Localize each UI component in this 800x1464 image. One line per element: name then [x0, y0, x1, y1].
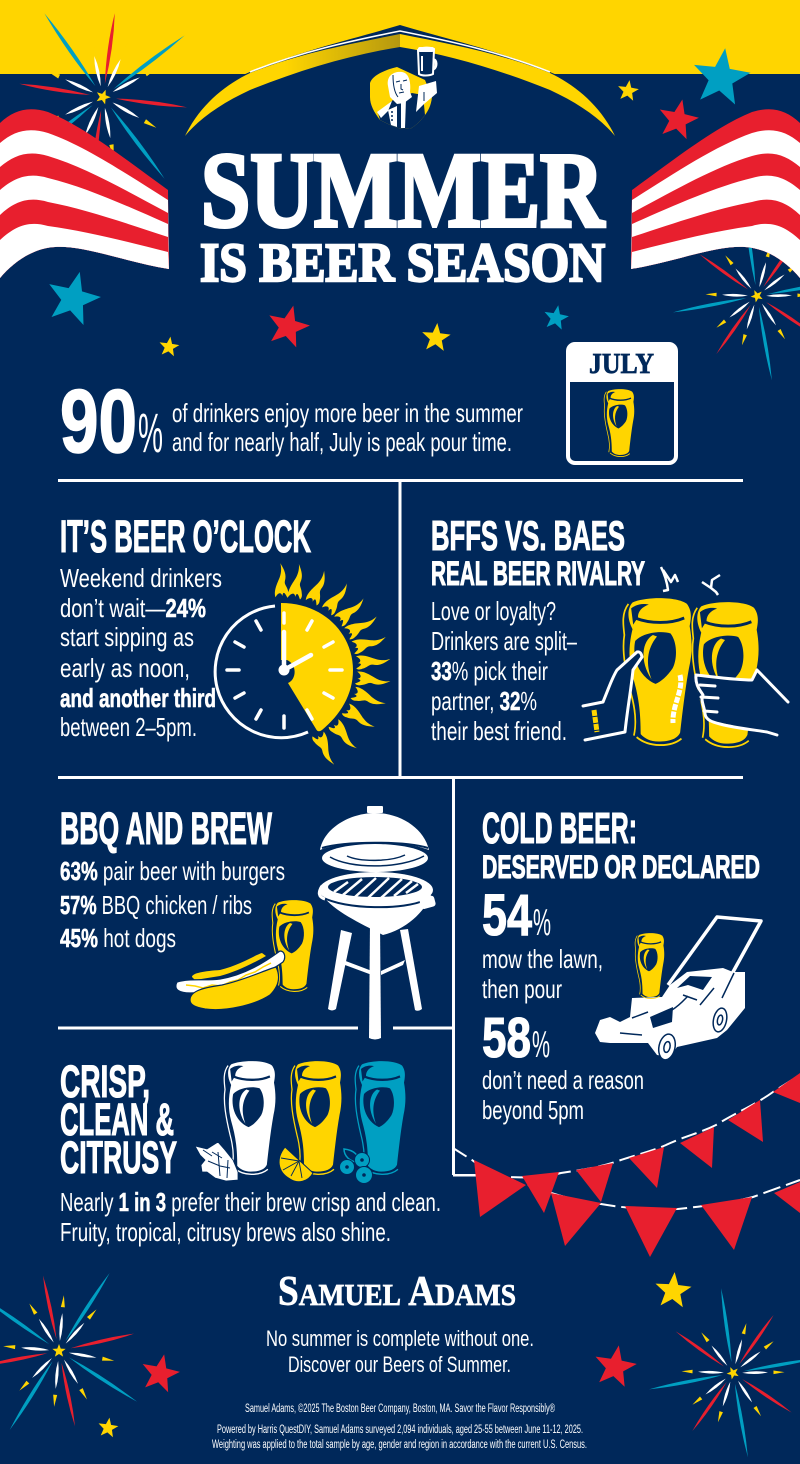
title — [200, 132, 605, 293]
stat: 54 percent — [482, 883, 603, 1004]
legal text: Weighting was applied to the total sample by age, gender and region in accordance with the current U.S. Census. — [212, 1439, 587, 1451]
body text: start sipping as — [60, 622, 194, 652]
heading: BFFS VS. BAES — [431, 512, 625, 559]
icon: July calendar — [568, 344, 676, 463]
flag: left — [0, 109, 169, 278]
stat: 58 percent: 58 — [482, 1006, 531, 1070]
body text: Fruity, tropical, citrusy brews also shine. — [60, 1217, 391, 1247]
firework: bottom left — [0, 1272, 138, 1431]
heading: CITRUSY — [60, 1132, 177, 1183]
stat: 58 percent: beyond 5pm — [482, 1095, 584, 1125]
legal text: Powered by Harris QuestDIY, Samuel Adams surveyed 2,094 individuals, aged 25-55 between June 11-12, 2025. — [217, 1424, 583, 1436]
flag: right — [631, 109, 800, 278]
panel: BFFs vs. baes — [431, 512, 788, 747]
footer — [212, 1269, 587, 1451]
top yellow band — [0, 0, 800, 74]
stat: 54 percent: then pour — [482, 974, 562, 1004]
stats list: 45% hot dogs — [60, 923, 176, 953]
tagline: Discover our Beers of Summer. — [288, 1352, 511, 1377]
stat: 54 percent: 54 — [482, 883, 532, 948]
title: IS BEER SEASON — [200, 232, 605, 293]
divider lines — [58, 479, 743, 1175]
legal text — [212, 1403, 587, 1451]
stat: 54 percent: % — [533, 902, 551, 944]
body text: Nearly 1 in 3 prefer their brew crisp and clean. — [60, 1187, 441, 1217]
brand logo text: SAMUEL ADAMS — [278, 1269, 516, 1315]
panel: crisp, clean and citrusy — [60, 1056, 441, 1247]
panel: 90 percent stat — [60, 344, 676, 472]
stat: 58 percent — [482, 1006, 644, 1125]
heading: REAL BEER RIVALRY — [431, 555, 645, 593]
heading: COLD BEER: — [482, 804, 637, 853]
body text: Love or loyalty? — [431, 596, 556, 626]
heading: CLEAN & — [60, 1094, 174, 1145]
icon: clinking beers and hands — [583, 567, 788, 747]
heading — [482, 804, 760, 885]
icon: yellow beer glass and lemon — [279, 1061, 341, 1182]
icon: lawn mower with beer — [595, 917, 761, 1061]
heading: IT’S BEER O’CLOCK — [60, 511, 311, 562]
logo: brewer with raised mug — [370, 47, 437, 129]
stat: 58 percent: % — [532, 1024, 550, 1066]
body text: between 2–5pm. — [60, 712, 197, 742]
heading: BBQ AND BREW — [60, 803, 272, 854]
panel: BBQ and brew — [60, 803, 436, 1040]
bunting — [453, 1073, 800, 1257]
body text — [431, 596, 577, 746]
body text: their best friend. — [431, 716, 567, 746]
heading: CRISP, — [60, 1056, 150, 1107]
title: SUMMER — [201, 132, 605, 250]
tagline: No summer is complete without one. — [266, 1326, 534, 1351]
stat text: of drinkers enjoy more beer in the summer — [172, 398, 523, 428]
body text: don’t wait—24% — [60, 593, 206, 623]
body text — [60, 1187, 441, 1247]
stat: 58 percent: don’t need a reason — [482, 1065, 644, 1095]
heading — [60, 1056, 177, 1183]
stats list: 63% pair beer with burgers — [60, 856, 285, 886]
body text: Weekend drinkers — [60, 563, 222, 593]
legal text: Samuel Adams, ©2025 The Boston Beer Company, Boston, MA. Savor the Flavor Responsibly® — [245, 1403, 555, 1415]
icon: beer and hot dog — [176, 900, 313, 1010]
arch with logo — [185, 25, 615, 136]
stat: 54 percent: mow the lawn, — [482, 944, 603, 974]
stats list — [60, 856, 285, 953]
body text — [60, 563, 222, 742]
icon: sun clock — [215, 563, 391, 768]
body text: 33% pick their — [431, 656, 548, 686]
panel: 90 percent stat: and for nearly half, July is peak pour time. — [172, 427, 512, 457]
icon: blue beer glass and blueberries — [340, 1061, 405, 1184]
stats list: 57% BBQ chicken / ribs — [60, 890, 252, 920]
panel: cold beer — [482, 804, 761, 1125]
firework: top right — [655, 194, 800, 399]
stars: footer — [97, 1270, 693, 1438]
stat number: 90 — [60, 372, 137, 472]
body text: early as noon, — [60, 653, 190, 683]
body text: Drinkers are split– — [431, 626, 577, 656]
firework: bottom right — [631, 1271, 800, 1464]
panel: it's beer o'clock — [60, 511, 391, 768]
icon: kettle grill — [319, 806, 436, 1040]
heading — [431, 512, 645, 593]
body text: partner, 32% — [431, 686, 537, 716]
tagline — [266, 1326, 534, 1377]
firework: top left — [0, 0, 214, 209]
stars: header — [42, 44, 753, 357]
percent sign: % — [138, 401, 163, 464]
icon: July calendar: JULY — [589, 349, 654, 380]
icon: white beer glass and hops — [195, 1061, 275, 1181]
body text: and another third — [60, 683, 216, 713]
